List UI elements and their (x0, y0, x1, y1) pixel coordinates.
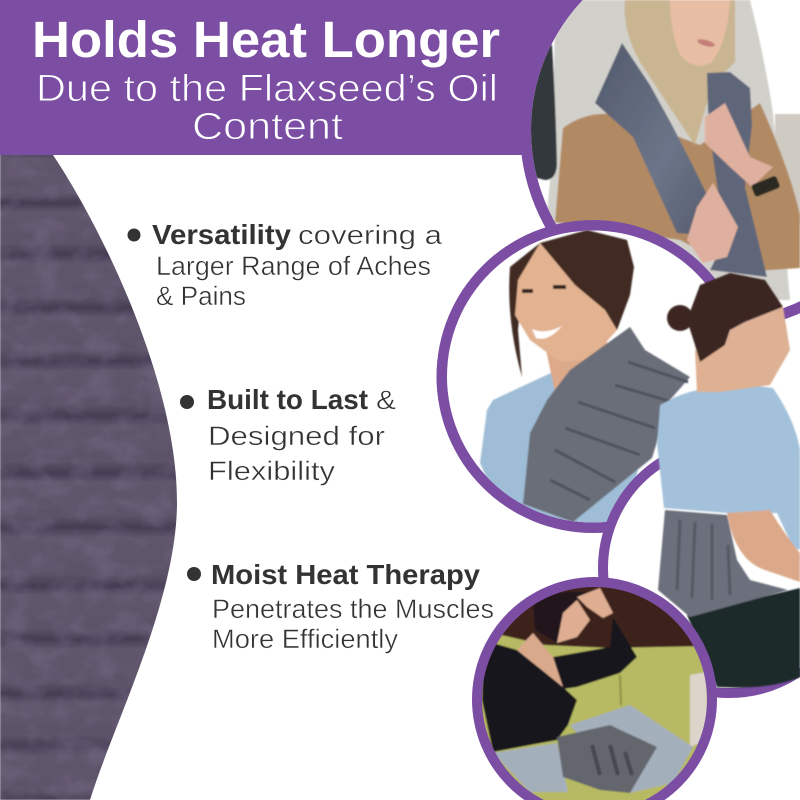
neck pad (523, 327, 690, 522)
bullet: built to last: Built to Last (207, 384, 368, 415)
jeans (687, 588, 800, 688)
sweater (555, 103, 800, 272)
chair and cushions (525, 0, 800, 300)
subtitle: Due to the Flaxseed’s Oil (36, 68, 498, 110)
face (557, 600, 590, 643)
bullet: versatility (128, 219, 443, 311)
brunette hair (509, 230, 634, 377)
pillow (690, 672, 708, 747)
lumbar wrap (658, 510, 788, 617)
watch (751, 175, 781, 197)
bullet: built to last: & (376, 385, 396, 415)
subtitle (36, 68, 498, 148)
blue sweater (480, 372, 640, 530)
sofa (470, 634, 720, 800)
eyes and smile (522, 287, 566, 291)
face profile (725, 307, 790, 385)
circle photo: woman wearing neck pad (436, 220, 716, 533)
black top (482, 643, 577, 752)
bullet: versatility: & Pains (156, 281, 246, 311)
raised sleeve (553, 617, 637, 689)
bullet: built to last (180, 384, 396, 486)
bullet: built to last: Designed for (208, 421, 385, 451)
neck (695, 345, 770, 392)
arm (727, 510, 800, 582)
bullet: moist heat therapy: Penetrates the Muscles (212, 594, 494, 624)
wall (502, 587, 694, 649)
blonde hair (625, 0, 735, 145)
bullet: moist heat therapy: Moist Heat Therapy (211, 559, 480, 590)
photo: fleece heat pad (0, 150, 180, 800)
lips (696, 38, 715, 48)
hand (577, 588, 613, 618)
cushion seam (620, 675, 621, 705)
bullet: versatility: Larger Range of Aches (156, 251, 431, 281)
bullet: moist heat therapy: More Efficiently (212, 624, 398, 654)
title: Holds Heat Longer (32, 11, 500, 68)
face (670, 0, 730, 66)
bullet: built to last: Flexibility (208, 456, 336, 486)
hair and bun (667, 273, 790, 385)
neck area (546, 341, 608, 390)
wrap right strip (707, 72, 767, 277)
circle photo: woman wearing lumbar wrap (598, 273, 800, 698)
bullet: moist heat therapy (187, 559, 494, 654)
circle photo: woman on sofa (470, 577, 720, 800)
grey trousers (493, 705, 693, 793)
skin neck and chest (517, 633, 563, 687)
hair (533, 592, 587, 643)
header banner (0, 0, 590, 155)
wrap left strip (595, 43, 712, 235)
face (515, 243, 617, 362)
blue shirt back (657, 386, 800, 550)
subtitle: Content (192, 106, 344, 148)
hands (687, 103, 773, 263)
bullet: versatility: covering a (298, 220, 443, 250)
circle photo: woman with neck wrap (520, 0, 800, 330)
heat pad on legs (557, 725, 657, 793)
bullet: versatility: Versatility (152, 219, 291, 250)
